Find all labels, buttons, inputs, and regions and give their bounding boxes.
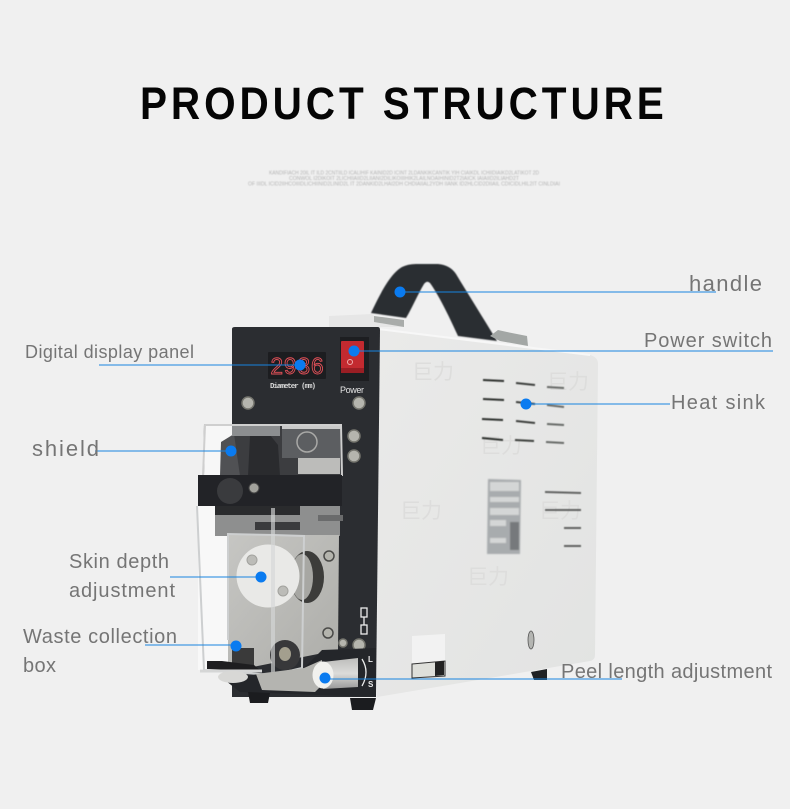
- callout: digital display panel: [25, 342, 306, 370]
- callout: heat sink: [520, 392, 766, 414]
- knob scale: L: [368, 655, 373, 664]
- dark bolt: [270, 640, 300, 670]
- callout: shield: [32, 436, 236, 461]
- callout: skin depth adjustment: adjustment: [69, 580, 176, 602]
- callout: power switch: Power switch: [644, 330, 773, 352]
- machine: [197, 264, 598, 710]
- rear socket: [412, 634, 445, 678]
- watermarks: 巨力: [547, 371, 589, 394]
- subtitle small text: CONWOL I2DIKOIT 2LICHIIAIID2LIIANI2DILIKOIIIHIK2LAILNOAIHINID2T2IAICK IAIAIID2ILIAHD2T: [289, 176, 519, 182]
- feet: [248, 692, 376, 710]
- callout: heat sink: Heat sink: [671, 392, 766, 414]
- panel screws: [242, 397, 365, 651]
- knurled shaft: [290, 551, 324, 603]
- metal plate: [228, 535, 339, 672]
- subtitle small text: OF IIIDL ICID2IIHCOIIIDLICHIINID2LINID2L IT 2DANKID2LHAI2DH CHDIAIIAL2YDH IIANK ID2HLCID2DIIAIL CDICIDLHIL2IT CINLDIAI: [248, 182, 560, 188]
- plate screws: [324, 551, 334, 561]
- watermarks: [400, 361, 589, 589]
- knob scale: [361, 608, 374, 689]
- right foot: [531, 669, 547, 680]
- title: PRODUCT STRUCTURE: [140, 79, 664, 130]
- callout: shield: shield: [32, 436, 100, 461]
- callout: handle: [394, 271, 763, 298]
- callout: skin depth adjustment: Skin depth: [69, 551, 170, 573]
- subtitle small text: KANDIFIACH 20IL IT ILD 2CNTIILD ICALIHIF KAINID2D ICINT 2LDANKIKCANTIK YIH CIAIKDL ICHIIDIAIKD2LATIKOT 2D: [269, 170, 539, 176]
- lower mechanism: [197, 506, 343, 675]
- power switch: [340, 337, 369, 395]
- watermarks: 巨力: [412, 361, 454, 384]
- heat sink vents: [482, 380, 581, 546]
- callout: peel length adjustment: [320, 661, 773, 684]
- watermarks: 巨力: [480, 435, 522, 458]
- lower base: [218, 648, 376, 697]
- clear shield edges: [197, 506, 304, 675]
- rear screw: [528, 631, 534, 649]
- handle brackets: [329, 314, 528, 346]
- watermarks: 巨力: [467, 566, 509, 589]
- display caption: Diameter (mm): [270, 383, 316, 391]
- callout: power switch: [348, 330, 773, 356]
- callout: skin depth adjustment: [69, 551, 266, 602]
- callout: peel length adjustment: Peel length adjustment: [561, 661, 773, 683]
- watermarks: 巨力: [400, 500, 442, 523]
- clamp bar: [198, 475, 342, 506]
- digital display: 2936: [270, 355, 324, 382]
- upper shield: [203, 424, 342, 476]
- knob scale: S: [368, 680, 374, 689]
- front black panel: [232, 327, 380, 697]
- callout: handle: handle: [689, 271, 763, 296]
- waste chute: [232, 648, 254, 668]
- watermarks: 巨力: [539, 500, 581, 523]
- handle: [371, 264, 497, 341]
- callout: waste collection box: [23, 626, 242, 677]
- callout: waste collection box: box: [23, 655, 57, 677]
- callout: digital display panel: Digital display panel: [25, 342, 195, 362]
- side casing: [377, 329, 598, 697]
- peel length knob: [312, 658, 358, 689]
- subtitle small text: [248, 170, 560, 188]
- white dial: [236, 544, 300, 608]
- spec label: [487, 479, 521, 554]
- callout: waste collection box: Waste collection: [23, 626, 178, 648]
- power caption: Power: [340, 385, 364, 395]
- digital display: [268, 352, 326, 391]
